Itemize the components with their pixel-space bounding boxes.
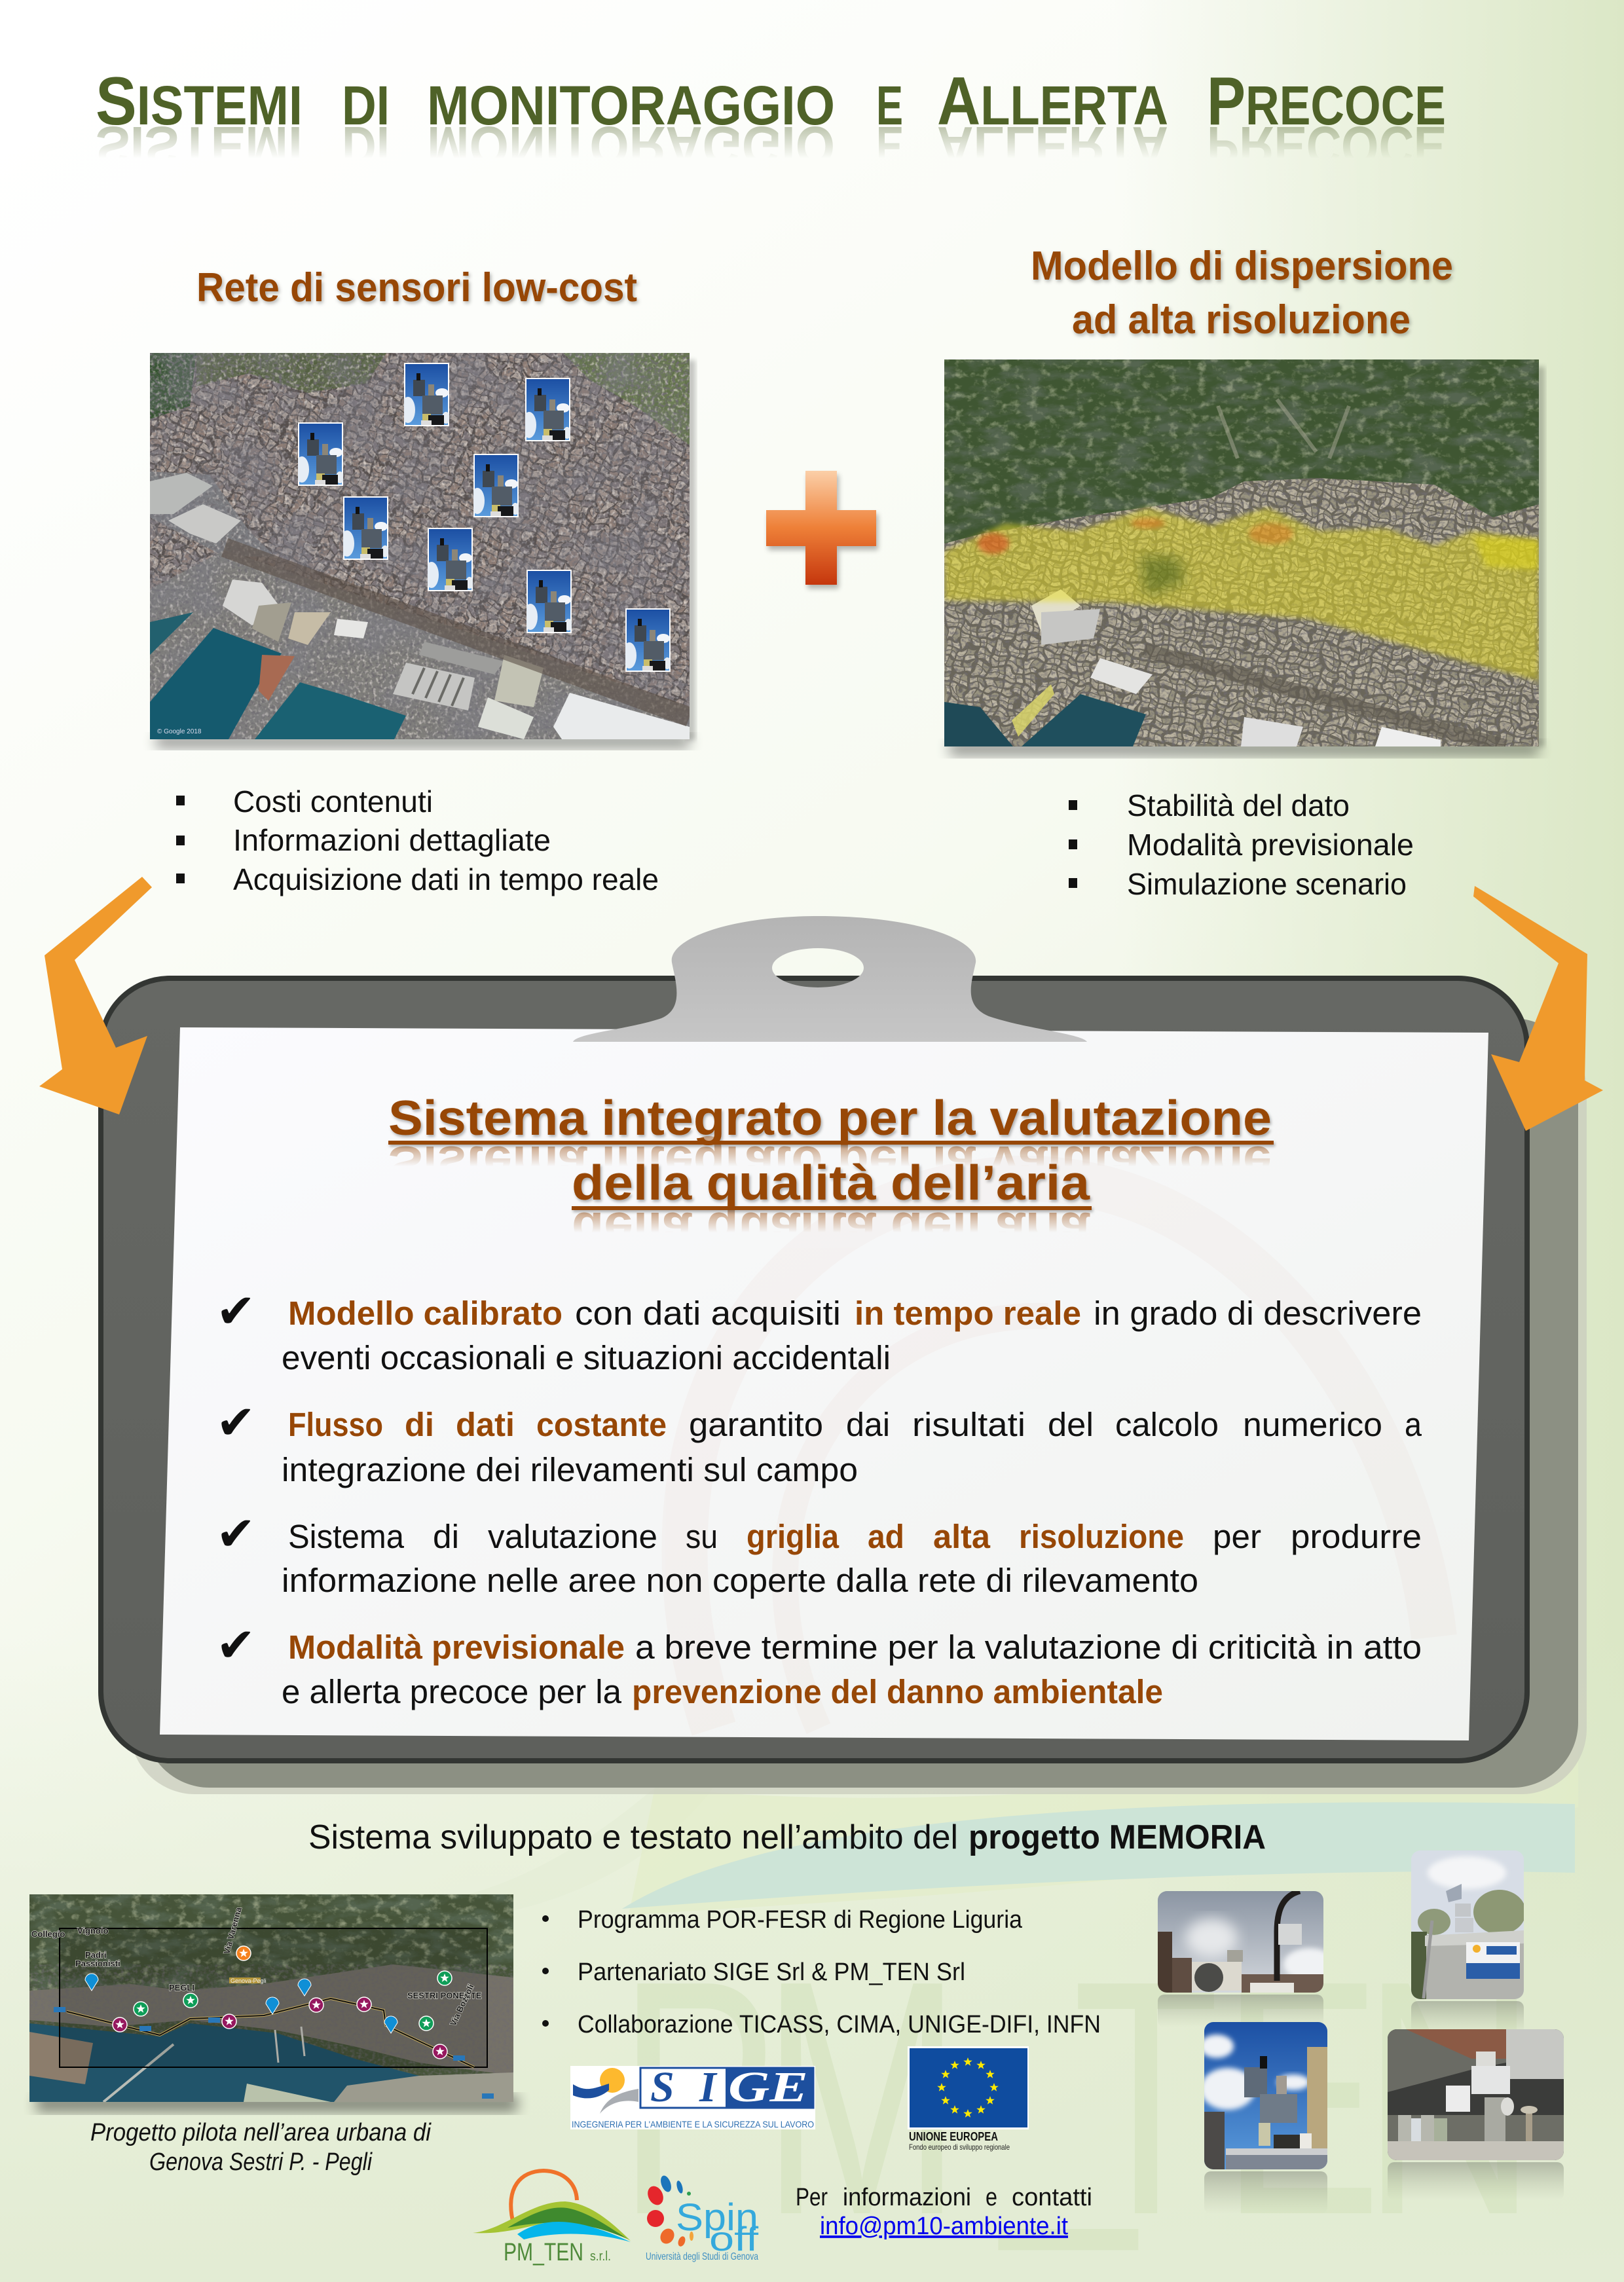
map: pilot area: Passionisti — [75, 1959, 120, 1968]
photo: station with blue sky — [1200, 2022, 1327, 2214]
logo: SIGE: I — [699, 2063, 718, 2111]
item: modello calibrato: con dati acquisiti — [575, 1295, 841, 1332]
item: griglia: di — [433, 1518, 459, 1555]
item: flusso di dati: integrazione dei rilevamenti sul campo — [282, 1451, 858, 1488]
item: flusso di dati — [216, 1395, 1422, 1488]
contact: e — [986, 2184, 997, 2211]
logo: PM_TEN — [473, 2171, 631, 2266]
photo: aerial city with low-cost sensors: © Google 2018 — [157, 728, 202, 735]
item: griglia: alta — [933, 1518, 991, 1555]
logo: SIGE — [570, 2063, 815, 2129]
title: SISTEMI — [96, 64, 303, 139]
icon: sensor markers — [295, 363, 671, 672]
logo: SIGE: GE — [728, 2063, 808, 2111]
heading: dispersion model — [1031, 244, 1453, 342]
list: project details — [542, 1906, 1101, 2038]
title: E — [876, 75, 903, 136]
clipboard paper — [160, 1027, 1488, 1740]
title: MONITORAGGIO — [427, 75, 835, 136]
item: modello calibrato: in tempo reale — [855, 1295, 1081, 1332]
title: PRECOCE — [1207, 115, 1446, 177]
background: TEN — [1073, 1912, 1536, 2282]
title — [96, 64, 1446, 177]
title: ALLERTA — [937, 64, 1168, 139]
contact: info@pm10-ambiente.it — [820, 2213, 1068, 2240]
item: modalita previsionale: a breve termine per la valutazione di criticità in atto — [635, 1629, 1422, 1666]
project line — [308, 1818, 1266, 1856]
item: flusso di dati: garantito — [689, 1406, 823, 1443]
panel: clipboard — [101, 916, 1587, 1794]
logo: SIGE: INGEGNERIA PER L'AMBIENTE E LA SICUREZZA SUL LAVORO — [572, 2119, 814, 2129]
photo: station with air conditioner — [1158, 1891, 1323, 2020]
item: griglia: ✔ — [216, 1506, 255, 1561]
item: modalita previsionale — [216, 1617, 1422, 1710]
logo: Spin off: Spin — [676, 2196, 758, 2239]
item: griglia: valutazione — [488, 1518, 657, 1555]
logo: European Union: Fondo europeo di sviluppo regionale — [909, 2143, 1010, 2152]
item: flusso di dati: Flusso — [288, 1406, 383, 1443]
heading: integrated system: della qualità dell’aria — [572, 1155, 1090, 1210]
map markers — [85, 1946, 452, 2059]
logo: European Union: UNIONE EUROPEA — [909, 2130, 998, 2143]
item: griglia: informazione nelle aree non coperte dalla rete di rilevamento — [282, 1562, 1198, 1599]
photo: dispersion model over city — [944, 359, 1545, 756]
list: model benefits: Modalità previsionale — [1127, 828, 1414, 862]
photo: station under viaduct — [1388, 2029, 1564, 2200]
item: modello calibrato — [216, 1283, 1422, 1376]
logo: PM_TEN: PM_TEN — [504, 2239, 583, 2266]
title: DI — [342, 75, 390, 136]
logo: European Union — [908, 2046, 1029, 2152]
list: project details: Collaborazione TICASS, CIMA, UNIGE-DIFI, INFN — [578, 2011, 1101, 2038]
item: griglia: per — [1213, 1518, 1261, 1555]
item: modello calibrato: in grado di descrivere — [1094, 1295, 1422, 1332]
contact: informazioni — [843, 2184, 971, 2211]
item: flusso di dati: numerico — [1243, 1406, 1382, 1443]
map caption: Genova Sestri P. - Pegli — [149, 2148, 373, 2176]
logo: SIGE: S — [650, 2063, 674, 2111]
item: modalita previsionale: ✔ — [216, 1617, 255, 1672]
map: pilot area: Via Varenna — [221, 1905, 244, 1955]
heading: integrated system: Sistema integrato per la valutazione — [388, 1090, 1272, 1145]
map caption — [90, 2119, 432, 2176]
item: griglia — [216, 1506, 1422, 1599]
map: pilot area — [29, 1894, 517, 2112]
heading: integrated system: della qualità dell’aria — [572, 1202, 1090, 1257]
map: pilot area: Via Bozzoli — [448, 1983, 476, 2027]
item: modalita previsionale: Modalità previsionale — [288, 1629, 625, 1666]
list: sensor benefits: Costi contenuti — [233, 784, 433, 819]
arrow: right — [1473, 886, 1603, 1131]
heading: integrated system: Sistema integrato per la valutazione — [388, 1136, 1272, 1191]
logo: Spin off: Università degli Studi di Genova — [646, 2251, 758, 2262]
icon: plus sign — [766, 471, 878, 589]
map: pilot area: Collegio — [31, 1929, 65, 1939]
logo: Spin off: off — [709, 2220, 759, 2258]
item: flusso di dati: del — [1048, 1406, 1094, 1443]
contact: contatti — [1012, 2184, 1092, 2211]
heading: sensor network: Rete di sensori low-cost — [196, 265, 637, 310]
contact — [796, 2184, 1092, 2240]
heading: dispersion model: Modello di dispersione — [1031, 244, 1453, 289]
item: modalita previsionale: prevenzione del danno ambientale — [632, 1673, 1163, 1710]
item: griglia: su — [686, 1518, 718, 1555]
item: flusso di dati: risultati — [912, 1406, 1025, 1443]
photo: station with SIGE sign — [1411, 1850, 1526, 2034]
title: DI — [342, 115, 390, 177]
list: model benefits — [1069, 788, 1414, 901]
item: griglia: griglia — [747, 1518, 840, 1555]
faint logo arcs — [684, 1179, 1434, 1729]
project line: Sistema sviluppato e testato nell’ambito del — [308, 1818, 958, 1856]
item: flusso di dati: ✔ — [216, 1395, 255, 1450]
item: flusso di dati: costante — [536, 1406, 667, 1443]
background: _ — [998, 1883, 1141, 2255]
list: project details: Programma POR-FESR di Regione Liguria — [578, 1906, 1023, 1934]
map: pilot area: Vignolo — [77, 1926, 108, 1936]
map: pilot area: Genova-Pegli — [231, 1978, 267, 1984]
map: pilot area: SESTRI PONENTE — [407, 1991, 482, 2000]
title: MONITORAGGIO — [427, 115, 835, 177]
list: model benefits: Simulazione scenario — [1127, 867, 1407, 901]
heading: integrated system — [388, 1090, 1274, 1257]
title: E — [876, 115, 903, 177]
logo: PM_TEN: s.r.l. — [590, 2249, 611, 2264]
title: PRECOCE — [1207, 64, 1446, 139]
item: flusso di dati: dai — [846, 1406, 890, 1443]
item: flusso di dati: a — [1405, 1406, 1422, 1443]
item: modello calibrato: eventi occasionali e situazioni accidentali — [282, 1339, 891, 1376]
item: flusso di dati: calcolo — [1115, 1406, 1219, 1443]
heading: dispersion model: ad alta risoluzione — [1072, 297, 1411, 342]
item: flusso di dati: dati — [456, 1406, 515, 1443]
item: modello calibrato: ✔ — [216, 1283, 255, 1338]
list: sensor benefits: Acquisizione dati in tempo reale — [233, 862, 659, 896]
list: sensor benefits — [176, 784, 659, 896]
item: flusso di dati: di — [405, 1406, 434, 1443]
list: model benefits: Stabilità del dato — [1127, 788, 1350, 822]
list: project details: Partenariato SIGE Srl & PM_TEN Srl — [578, 1959, 965, 1986]
map: pilot area: PEGLI — [169, 1983, 194, 1993]
map: pilot area: Padri — [85, 1950, 107, 1960]
item: griglia: risoluzione — [1019, 1518, 1184, 1555]
logo: Spin off — [645, 2174, 759, 2262]
item: griglia: ad — [868, 1518, 904, 1555]
background: PM — [618, 1912, 962, 2282]
title: SISTEMI — [96, 115, 303, 177]
item: griglia: Sistema — [288, 1518, 405, 1555]
contact: Per — [796, 2184, 828, 2211]
item: griglia: produrre — [1291, 1518, 1422, 1555]
item: modello calibrato: Modello calibrato — [288, 1295, 563, 1332]
list: sensor benefits: Informazioni dettagliate — [233, 823, 551, 857]
map caption: Progetto pilota nell’area urbana di — [90, 2119, 432, 2146]
title: ALLERTA — [937, 115, 1168, 177]
project line: progetto MEMORIA — [969, 1818, 1266, 1856]
photo: aerial city with low-cost sensors — [150, 353, 695, 748]
clipboard clip — [573, 916, 1087, 1042]
arrow: left — [39, 877, 152, 1114]
item: modalita previsionale: e allerta precoce per la — [282, 1673, 622, 1710]
